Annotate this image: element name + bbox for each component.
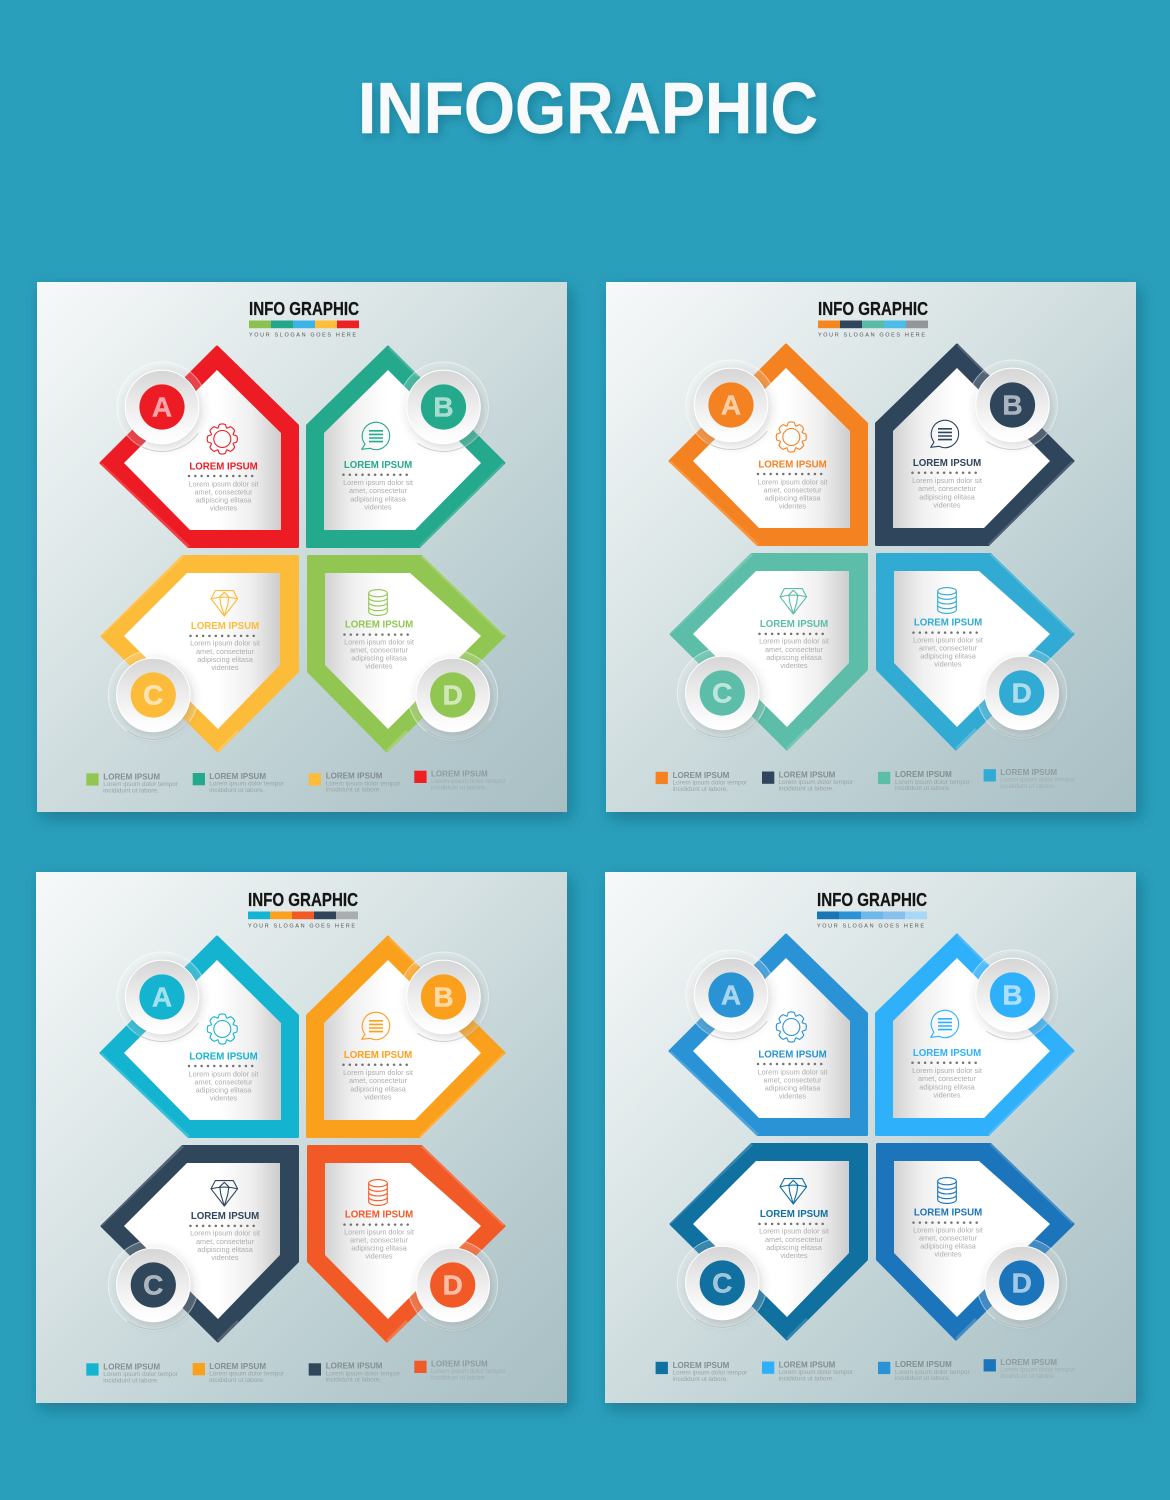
- quadrant A: Lorem ipsum dolor sit: [758, 477, 827, 486]
- quadrant D: LOREM IPSUM: [345, 1210, 413, 1221]
- quadrant B: LOREM IPSUM: [913, 458, 981, 469]
- quadrant A: A: [721, 980, 741, 1011]
- quadrant C: LOREM IPSUM: [760, 619, 828, 630]
- quadrant C: amet, consectetur: [765, 645, 824, 654]
- quadrant B: Lorem ipsum dolor sit: [343, 1068, 413, 1077]
- heading block: [248, 890, 358, 930]
- legend: LOREM IPSUM: [103, 1362, 160, 1371]
- quadrant D: LOREM IPSUM: [345, 620, 413, 631]
- quadrant B: amet, consectetur: [918, 484, 977, 493]
- legend: Lorem ipsum dolor tempor: [103, 1371, 179, 1378]
- legend: LOREM IPSUM: [895, 770, 952, 779]
- quadrant A: amet, consectetur: [764, 1075, 822, 1084]
- legend: Lorem ipsum dolor tempor: [431, 1368, 506, 1375]
- quadrant D: LOREM IPSUM: [914, 1208, 982, 1219]
- quadrant C: videntes: [780, 1251, 808, 1260]
- quadrant C: adipiscing elitasa: [766, 653, 823, 662]
- legend: incididunt ut labore.: [673, 786, 728, 793]
- legend: LOREM IPSUM: [895, 1360, 952, 1369]
- panel: blue variant: [605, 872, 1136, 1403]
- quadrant A: [101, 347, 298, 547]
- quadrant A: videntes: [779, 502, 806, 511]
- quadrant D: Lorem ipsum dolor sit: [344, 637, 414, 646]
- diagram: [670, 935, 1073, 1339]
- heading block: YOUR SLOGAN GOES HERE: [248, 924, 355, 930]
- quadrant D: amet, consectetur: [350, 1236, 409, 1245]
- legend: incididunt ut labore.: [779, 1376, 834, 1382]
- legend: LOREM IPSUM: [431, 770, 488, 779]
- quadrant D: LOREM IPSUM: [914, 618, 982, 629]
- quadrant D: [308, 1146, 504, 1341]
- legend: incididunt ut labore.: [1000, 1373, 1056, 1380]
- quadrant D: Lorem ipsum dolor sit: [913, 1225, 983, 1234]
- legend: Lorem ipsum dolor tempor: [103, 781, 179, 788]
- heading block: INFO GRAPHIC: [249, 299, 359, 319]
- quadrant B: B: [433, 392, 454, 423]
- quadrant B: Lorem ipsum dolor sit: [912, 1066, 982, 1075]
- quadrant B: LOREM IPSUM: [913, 1048, 981, 1059]
- heading block: [249, 299, 359, 339]
- legend: incididunt ut labore.: [1000, 783, 1056, 790]
- quadrant D: videntes: [365, 662, 393, 671]
- quadrant C: LOREM IPSUM: [191, 1211, 259, 1222]
- quadrant D: amet, consectetur: [919, 644, 978, 653]
- quadrant C: [101, 1146, 298, 1341]
- quadrant B: [876, 345, 1073, 545]
- quadrant A: amet, consectetur: [194, 487, 253, 496]
- legend: [656, 768, 1076, 793]
- legend: Lorem ipsum dolor tempor: [326, 1370, 401, 1377]
- quadrant D: adipiscing elitasa: [351, 1244, 408, 1253]
- heading block: [817, 890, 927, 930]
- legend: incididunt ut labore.: [431, 784, 487, 791]
- legend: Lorem ipsum dolor tempor: [209, 1371, 285, 1378]
- quadrant C: [670, 554, 866, 749]
- legend: [86, 1360, 506, 1384]
- quadrant B: videntes: [933, 1090, 961, 1099]
- quadrant B: Lorem ipsum dolor sit: [912, 476, 982, 485]
- legend: LOREM IPSUM: [779, 1360, 836, 1369]
- legend: incididunt ut labore.: [779, 786, 834, 792]
- quadrant C: C: [712, 1268, 732, 1299]
- quadrant C: [101, 556, 298, 751]
- quadrant C: adipiscing elitasa: [766, 1243, 823, 1252]
- legend: incididunt ut labore.: [326, 787, 381, 794]
- quadrant D: videntes: [934, 660, 962, 669]
- quadrant D: videntes: [365, 1252, 393, 1261]
- quadrant C: adipiscing elitasa: [197, 1245, 254, 1254]
- quadrant C: videntes: [211, 663, 239, 672]
- diagram: [101, 937, 504, 1341]
- quadrant A: A: [152, 392, 172, 423]
- quadrant A: videntes: [779, 1092, 806, 1101]
- legend: LOREM IPSUM: [209, 1362, 266, 1371]
- legend: incididunt ut labore.: [103, 1377, 159, 1384]
- legend: Lorem ipsum dolor tempor: [1000, 1367, 1076, 1374]
- quadrant A: A: [721, 390, 741, 421]
- legend: Lorem ipsum dolor tempor: [779, 779, 854, 786]
- quadrant B: Lorem ipsum dolor sit: [343, 478, 413, 487]
- legend: incididunt ut labore.: [326, 1377, 381, 1384]
- quadrant B: adipiscing elitasa: [919, 492, 976, 501]
- quadrant B: B: [433, 982, 454, 1013]
- legend: Lorem ipsum dolor tempor: [326, 780, 401, 787]
- heading block: INFO GRAPHIC: [248, 890, 358, 910]
- quadrant D: videntes: [934, 1250, 962, 1259]
- quadrant D: D: [1012, 1268, 1032, 1299]
- title: INFOGRAPHIC: [358, 68, 818, 149]
- quadrant D: D: [1012, 678, 1032, 709]
- legend: LOREM IPSUM: [103, 772, 160, 781]
- legend: incididunt ut labore.: [103, 787, 159, 794]
- quadrant C: Lorem ipsum dolor sit: [190, 639, 260, 648]
- quadrant B: [308, 937, 504, 1137]
- legend: LOREM IPSUM: [779, 770, 836, 779]
- quadrant B: adipiscing elitasa: [350, 1084, 407, 1093]
- legend: LOREM IPSUM: [431, 1360, 488, 1369]
- quadrant A: [670, 345, 866, 545]
- legend: LOREM IPSUM: [1000, 768, 1057, 777]
- heading block: YOUR SLOGAN GOES HERE: [818, 333, 925, 339]
- legend: incididunt ut labore.: [895, 1375, 951, 1382]
- quadrant C: adipiscing elitasa: [197, 655, 254, 664]
- legend: LOREM IPSUM: [326, 1361, 383, 1370]
- legend: incididunt ut labore.: [673, 1376, 728, 1383]
- legend: LOREM IPSUM: [673, 771, 730, 780]
- legend: incididunt ut labore.: [209, 787, 265, 794]
- panel: red green yellow variant: [37, 282, 567, 812]
- quadrant D: adipiscing elitasa: [351, 654, 408, 663]
- quadrant D: amet, consectetur: [350, 646, 409, 655]
- quadrant C: amet, consectetur: [196, 1237, 255, 1246]
- legend: Lorem ipsum dolor tempor: [895, 779, 970, 786]
- heading block: [818, 299, 928, 339]
- quadrant A: adipiscing elitasa: [196, 1086, 252, 1095]
- quadrant C: videntes: [780, 661, 808, 670]
- quadrant A: videntes: [210, 504, 237, 513]
- quadrant B: amet, consectetur: [349, 1076, 408, 1085]
- quadrant C: [670, 1144, 866, 1339]
- quadrant B: adipiscing elitasa: [919, 1082, 976, 1091]
- quadrant A: LOREM IPSUM: [189, 1051, 258, 1062]
- legend: Lorem ipsum dolor tempor: [209, 781, 285, 788]
- quadrant B: adipiscing elitasa: [350, 494, 407, 503]
- quadrant B: [308, 347, 504, 547]
- quadrant D: [878, 1144, 1073, 1339]
- quadrant A: Lorem ipsum dolor sit: [189, 1069, 258, 1078]
- heading block: YOUR SLOGAN GOES HERE: [249, 333, 356, 339]
- quadrant D: D: [443, 1270, 463, 1301]
- panel: cyan orange navy variant: [36, 872, 567, 1403]
- quadrant B: LOREM IPSUM: [344, 1050, 412, 1061]
- heading block: INFO GRAPHIC: [818, 299, 928, 319]
- quadrant A: adipiscing elitasa: [765, 494, 821, 503]
- quadrant A: adipiscing elitasa: [196, 496, 252, 505]
- quadrant A: amet, consectetur: [764, 485, 822, 494]
- quadrant C: videntes: [211, 1253, 239, 1262]
- quadrant C: LOREM IPSUM: [760, 1209, 828, 1220]
- quadrant C: Lorem ipsum dolor sit: [759, 637, 829, 646]
- quadrant C: amet, consectetur: [196, 647, 255, 656]
- diagram: [670, 345, 1073, 749]
- legend: Lorem ipsum dolor tempor: [673, 779, 748, 786]
- quadrant D: Lorem ipsum dolor sit: [344, 1227, 414, 1236]
- legend: incididunt ut labore.: [895, 785, 951, 792]
- legend: Lorem ipsum dolor tempor: [779, 1369, 854, 1376]
- quadrant A: [670, 935, 866, 1135]
- legend: LOREM IPSUM: [209, 772, 266, 781]
- quadrant A: videntes: [210, 1094, 237, 1103]
- quadrant A: LOREM IPSUM: [758, 1049, 827, 1060]
- quadrant B: [876, 935, 1073, 1135]
- quadrant C: C: [712, 678, 732, 709]
- quadrant A: LOREM IPSUM: [758, 459, 827, 470]
- quadrant D: D: [443, 680, 463, 711]
- diagram: [101, 347, 504, 751]
- quadrant B: videntes: [364, 1092, 392, 1101]
- quadrant C: Lorem ipsum dolor sit: [759, 1227, 829, 1236]
- quadrant A: Lorem ipsum dolor sit: [189, 479, 258, 488]
- quadrant D: adipiscing elitasa: [920, 1242, 977, 1251]
- quadrant D: amet, consectetur: [919, 1234, 978, 1243]
- quadrant D: [308, 556, 504, 751]
- quadrant A: Lorem ipsum dolor sit: [758, 1067, 827, 1076]
- legend: incididunt ut labore.: [209, 1377, 265, 1384]
- quadrant A: adipiscing elitasa: [765, 1084, 821, 1093]
- quadrant B: amet, consectetur: [918, 1074, 977, 1083]
- quadrant A: amet, consectetur: [194, 1077, 253, 1086]
- quadrant B: videntes: [933, 500, 961, 509]
- quadrant B: LOREM IPSUM: [344, 460, 412, 471]
- legend: [656, 1358, 1076, 1383]
- quadrant C: amet, consectetur: [765, 1235, 824, 1244]
- panel: orange navy teal variant: [606, 282, 1136, 812]
- quadrant C: Lorem ipsum dolor sit: [190, 1229, 260, 1238]
- legend: Lorem ipsum dolor tempor: [673, 1369, 748, 1376]
- quadrant B: B: [1002, 980, 1023, 1011]
- quadrant B: amet, consectetur: [349, 486, 408, 495]
- heading block: INFO GRAPHIC: [817, 890, 927, 910]
- legend: LOREM IPSUM: [1000, 1358, 1057, 1367]
- quadrant C: LOREM IPSUM: [191, 621, 259, 632]
- quadrant D: Lorem ipsum dolor sit: [913, 635, 983, 644]
- quadrant C: C: [143, 680, 163, 711]
- legend: Lorem ipsum dolor tempor: [1000, 777, 1076, 784]
- heading block: YOUR SLOGAN GOES HERE: [817, 924, 924, 930]
- legend: Lorem ipsum dolor tempor: [895, 1369, 970, 1376]
- quadrant A: LOREM IPSUM: [189, 461, 258, 472]
- quadrant C: C: [143, 1270, 163, 1301]
- quadrant D: adipiscing elitasa: [920, 652, 977, 661]
- quadrant B: B: [1002, 390, 1023, 421]
- legend: Lorem ipsum dolor tempor: [431, 778, 506, 785]
- quadrant D: [878, 554, 1073, 749]
- quadrant B: videntes: [364, 502, 392, 511]
- legend: [86, 770, 506, 794]
- quadrant A: A: [152, 982, 172, 1013]
- legend: LOREM IPSUM: [673, 1361, 730, 1370]
- legend: incididunt ut labore.: [431, 1374, 487, 1381]
- legend: LOREM IPSUM: [326, 771, 383, 780]
- quadrant A: [101, 937, 298, 1137]
